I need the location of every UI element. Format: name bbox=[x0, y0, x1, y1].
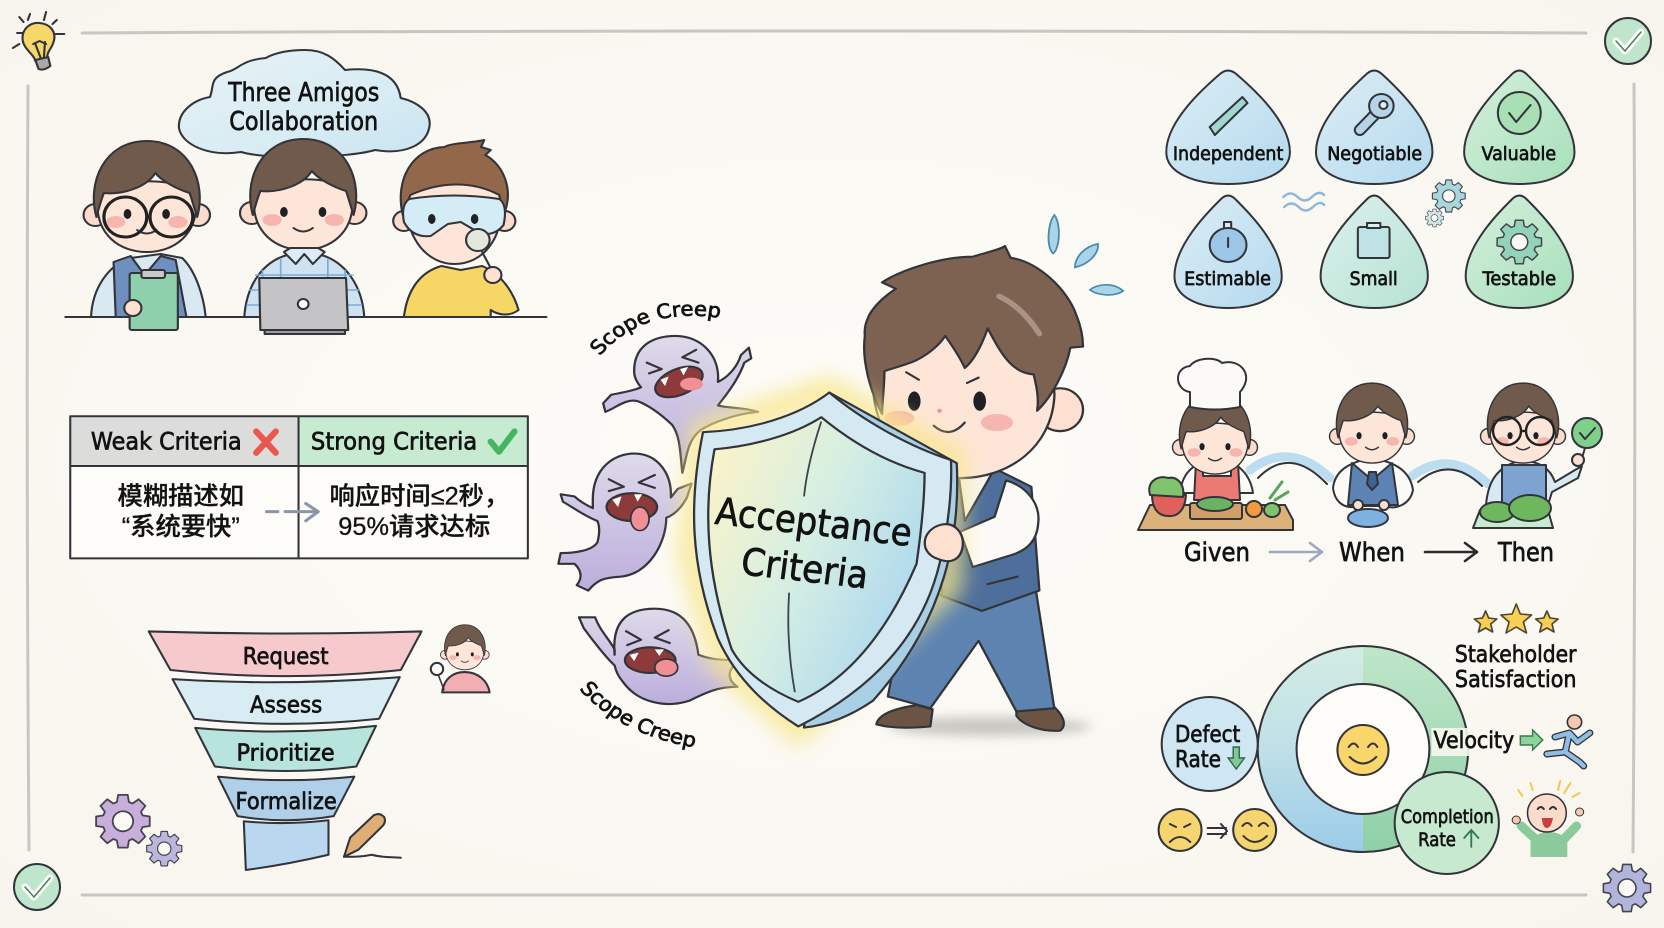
ghost label: scope creep top: Scope Creep bbox=[590, 302, 720, 355]
arrow: given to when bbox=[1270, 543, 1322, 561]
boy pressing button bbox=[1330, 383, 1414, 527]
arrow: when to then bbox=[1425, 543, 1477, 561]
drop: independent bbox=[1166, 71, 1290, 184]
icon: gear bottom right bbox=[1603, 864, 1651, 912]
funnel stage: request: Request bbox=[243, 642, 328, 670]
funnel stage: assess: Assess bbox=[250, 691, 322, 719]
funnel spout bbox=[244, 820, 328, 870]
drop: negotiable: Negotiable bbox=[1327, 142, 1422, 165]
drop: valuable bbox=[1464, 71, 1574, 184]
funnel stage: assess bbox=[173, 677, 400, 724]
drop: independent: Independent bbox=[1173, 142, 1284, 165]
stars bbox=[1474, 604, 1558, 633]
drop: negotiable bbox=[1316, 71, 1432, 184]
center smiley bbox=[1337, 725, 1389, 775]
shield glow bbox=[692, 390, 951, 729]
cloud with title bbox=[179, 50, 430, 157]
strong example text: 95%请求达标 bbox=[338, 513, 490, 541]
person with laptop bbox=[240, 139, 366, 334]
label: stakeholder satisfaction: Satisfaction bbox=[1455, 666, 1577, 693]
header: strong criteria: Strong Criteria bbox=[311, 427, 477, 456]
small person bbox=[431, 625, 490, 692]
bubble: completion rate: Completion bbox=[1401, 805, 1494, 828]
bubble: defect rate bbox=[1162, 697, 1258, 791]
decorative waves bbox=[1283, 193, 1324, 210]
chef boy bbox=[1138, 359, 1293, 530]
drop: small bbox=[1321, 196, 1428, 308]
shield title text: Acceptance bbox=[713, 490, 915, 556]
header: weak criteria: Weak Criteria bbox=[91, 427, 242, 456]
shield with title bbox=[694, 393, 957, 728]
funnel stage: formalize bbox=[218, 777, 354, 820]
panel: funnel bbox=[96, 625, 490, 870]
funnel stage: request bbox=[149, 631, 421, 676]
boy with salad and check sign bbox=[1473, 383, 1602, 528]
bubble: defect rate: Rate bbox=[1175, 746, 1221, 773]
strong example text: 响应时间≤2秒， bbox=[330, 483, 509, 510]
shield title text: Criteria bbox=[739, 540, 871, 598]
funnel stage: prioritize: Prioritize bbox=[237, 739, 335, 766]
connector curves bbox=[1250, 457, 1488, 486]
donut ring bbox=[1258, 646, 1468, 852]
drop: small: Small bbox=[1350, 267, 1398, 290]
person with goggles and magnifier bbox=[393, 140, 519, 317]
icon: large purple gear bbox=[96, 795, 150, 848]
hero hand bbox=[925, 524, 963, 561]
panel: hero with shield and scope creep ghosts bbox=[557, 214, 1124, 754]
drop: testable bbox=[1466, 196, 1573, 308]
table line bbox=[65, 316, 546, 318]
panel: satisfaction metrics bbox=[1159, 604, 1590, 874]
icon: teal gear bbox=[1432, 180, 1465, 212]
funnel stage: formalize: Formalize bbox=[236, 787, 337, 815]
velocity text backing bbox=[1431, 728, 1476, 756]
label: given: Given bbox=[1184, 538, 1250, 568]
cheering person bbox=[1512, 781, 1584, 857]
funnel stage: prioritize bbox=[195, 726, 376, 771]
table frame bbox=[70, 416, 528, 558]
panel: three amigos bbox=[65, 50, 546, 334]
label: when: When bbox=[1339, 538, 1405, 568]
arrow from weak to strong bbox=[267, 504, 318, 521]
icon: check badge top right bbox=[1605, 18, 1651, 64]
shield title text bbox=[707, 490, 915, 602]
panel: weak vs strong criteria table bbox=[70, 416, 528, 558]
label: stakeholder satisfaction: Stakeholder bbox=[1455, 641, 1577, 668]
drop: testable: Testable bbox=[1482, 267, 1556, 290]
panel: INVEST drops bbox=[1166, 71, 1574, 308]
bubble: defect rate: Defect bbox=[1175, 721, 1240, 748]
icon: pencil bbox=[344, 814, 401, 858]
ghost label: scope creep bottom: Scope Creep bbox=[580, 682, 696, 750]
icon: light bulb bbox=[13, 12, 64, 70]
ghost: top bbox=[603, 336, 758, 473]
ghost: middle bbox=[558, 454, 692, 591]
person with clipboard bbox=[84, 141, 210, 330]
drop: estimable bbox=[1174, 196, 1282, 308]
icon: runner bbox=[1547, 715, 1590, 766]
label: velocity with arrow: Velocity bbox=[1433, 727, 1514, 754]
icon: sweat drops bbox=[1049, 215, 1123, 295]
faces sad to happy bbox=[1159, 809, 1276, 851]
cloud with title: Collaboration bbox=[229, 107, 378, 137]
bubble: completion rate: Rate bbox=[1418, 828, 1456, 851]
bubble: completion rate bbox=[1395, 772, 1499, 874]
hero boy bbox=[864, 246, 1091, 736]
panel: given when then bbox=[1138, 359, 1602, 568]
label: then: Then bbox=[1497, 538, 1554, 568]
icon: check badge bottom left bbox=[14, 864, 60, 910]
weak example text: “系统要快” bbox=[122, 513, 240, 541]
cloud with title: Three Amigos bbox=[227, 78, 379, 108]
drop: valuable: Valuable bbox=[1482, 142, 1556, 165]
icon: small teal gear bbox=[1425, 209, 1444, 227]
weak example text: 模糊描述如 bbox=[118, 483, 244, 510]
ghost: bottom bbox=[579, 609, 741, 704]
drop: estimable: Estimable bbox=[1184, 267, 1271, 290]
icon: small purple gear bbox=[147, 831, 182, 866]
